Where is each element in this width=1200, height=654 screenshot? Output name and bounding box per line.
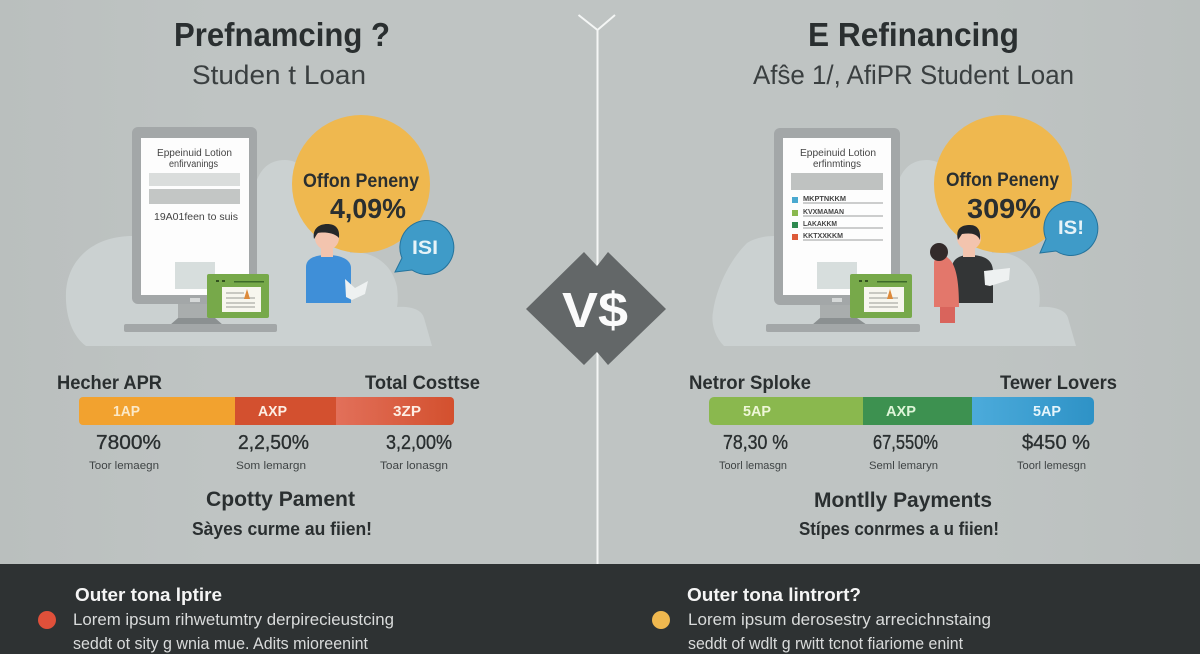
right screen text and list: LAKAKKM	[803, 221, 837, 228]
left stats: Toor lemaegn	[89, 460, 159, 472]
right green card	[850, 274, 912, 318]
left green card	[207, 274, 269, 318]
left title: Prefnamcing ?	[174, 16, 390, 53]
left screen text: Eppeinuid Lotion	[157, 148, 232, 159]
divider arrow line	[578, 15, 615, 564]
right payment text: Montlly Payments	[814, 489, 992, 512]
right bar headings	[689, 373, 1117, 394]
left title	[174, 16, 390, 90]
left speech bubble	[395, 220, 454, 274]
right bar headings: Tewer Lovers	[1000, 373, 1117, 394]
right payment text: Stípes conrmes a u fiien!	[799, 519, 999, 539]
footer right note: Outer tona lintrort?	[687, 585, 861, 605]
footer	[0, 564, 1200, 654]
left stats: 7800%	[96, 432, 161, 454]
right speech bubble: IS!	[1058, 218, 1084, 239]
right illustration cloud	[712, 160, 1076, 346]
vs badge: V$	[562, 284, 628, 338]
right screen text and list	[791, 148, 883, 289]
left bar headings: Hecher APR	[57, 373, 162, 394]
right people	[930, 225, 1010, 323]
left stacked bar: AXP	[258, 403, 287, 420]
left screen text: enfirvanings	[169, 159, 218, 170]
left illustration cloud	[66, 160, 432, 346]
right orange circle callout: 309%	[967, 193, 1041, 224]
right stacked bar	[709, 397, 1094, 425]
left title: Studen t Loan	[192, 60, 366, 90]
right stats: 78,30 %	[723, 432, 788, 454]
left payment text	[192, 488, 372, 539]
left screen text: 19A01feen to suis	[154, 211, 238, 223]
left stacked bar: 3ZP	[393, 403, 421, 420]
footer right note	[652, 585, 991, 653]
right stacked bar: 5AP	[743, 403, 771, 420]
right stats: 67,550%	[873, 432, 938, 454]
right screen text and list: KVXMAMAN	[803, 209, 844, 216]
right stats	[719, 432, 1090, 472]
left payment text: Sàyes curme au fiien!	[192, 519, 372, 539]
left orange circle callout: 4,09%	[330, 193, 406, 224]
right screen text and list: KKTXXKKM	[803, 233, 843, 240]
right stats: Toorl lemesgn	[1017, 460, 1086, 472]
footer left note: Lorem ipsum rihwetumtry derpirecieustcing	[73, 610, 394, 629]
left bar section	[57, 373, 480, 539]
right stats: Seml lemaryn	[869, 460, 938, 472]
left stats: 3,2,00%	[386, 432, 452, 454]
right screen text and list: erfinmtings	[813, 159, 861, 170]
left stacked bar: 1AP	[113, 403, 140, 420]
left monitor	[124, 127, 277, 332]
footer right note: Lorem ipsum derosestry arrecichnstaing	[688, 610, 991, 629]
left bar headings	[57, 373, 480, 394]
right stacked bar: AXP	[886, 403, 916, 420]
right stacked bar: 5AP	[1033, 403, 1061, 420]
vs badge	[526, 252, 666, 365]
right speech bubble	[1040, 201, 1098, 255]
right monitor	[766, 128, 920, 332]
right bar headings: Netror Sploke	[689, 373, 811, 394]
left orange circle callout: Offon Peneny	[303, 171, 419, 192]
left screen text	[149, 148, 240, 289]
left orange circle callout	[292, 115, 430, 253]
left stats: 2,2,50%	[238, 432, 309, 454]
left payment text: Cpotty Pament	[206, 488, 355, 511]
footer left note	[38, 585, 394, 653]
right title	[753, 16, 1074, 90]
panel: right refinancing	[712, 16, 1098, 346]
right title: Afŝe 1/, AfiPR Student Loan	[753, 60, 1074, 90]
left stacked bar	[79, 397, 454, 425]
left stats	[89, 432, 452, 472]
left stats: Som lemargn	[236, 460, 306, 472]
right screen text and list: Eppeinuid Lotion	[800, 148, 876, 159]
right bar section	[689, 373, 1117, 539]
footer right note: seddt of wdlt g rwitt tcnot fiariome enint	[688, 634, 963, 653]
right screen text and list: MKPTNKKM	[803, 196, 846, 203]
left speech bubble: ISI	[412, 238, 438, 259]
footer left note: seddt ot sity g wnia mue. Adits mioreenint	[73, 634, 368, 653]
right stats: $450 %	[1022, 432, 1090, 454]
panel: left prefinancing	[66, 16, 454, 346]
right payment text	[799, 489, 999, 539]
right orange circle callout: Offon Peneny	[946, 170, 1059, 191]
left bar headings: Total Costtse	[365, 373, 480, 394]
right title: E Refinancing	[808, 16, 1019, 53]
right stats: Toorl lemasgn	[719, 460, 787, 472]
left stats: Toar lonasgn	[380, 460, 448, 472]
footer left note: Outer tona lptire	[75, 585, 222, 605]
left person	[306, 224, 368, 303]
right orange circle callout	[934, 115, 1072, 253]
